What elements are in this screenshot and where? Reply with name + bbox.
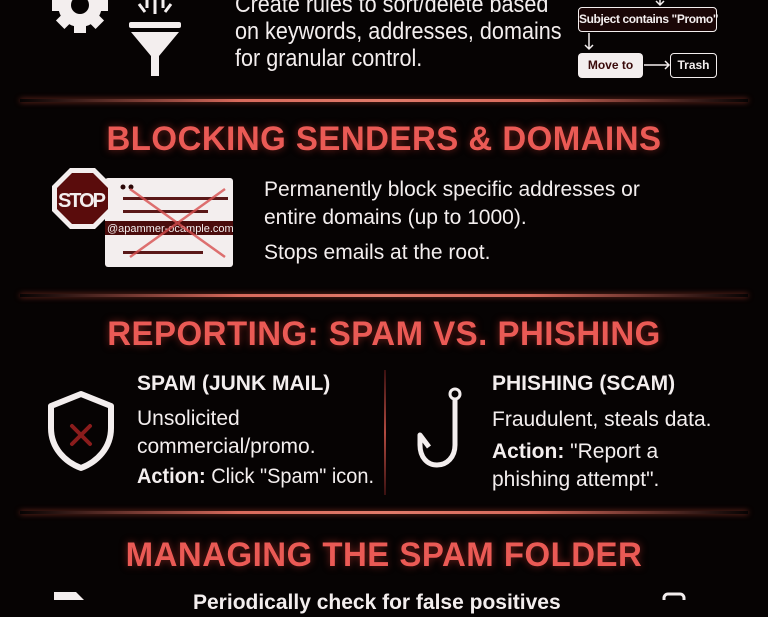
text: blocking description: Permanently block specific addresses or	[264, 178, 640, 201]
flow diagram: Subject contains "Promo"	[579, 12, 718, 26]
icon: stop sign with email card: @apammer-ocample.com	[107, 223, 234, 235]
text: blocking description	[264, 178, 640, 229]
flow diagram: Trash	[677, 58, 710, 72]
flow diagram: Move to	[588, 58, 633, 72]
icon: stop sign with email card: STOP	[58, 190, 106, 212]
icon: gear	[52, 0, 108, 33]
icon: shield	[48, 391, 114, 471]
panel: phishing: phishing attempt".	[492, 468, 659, 491]
flow diagram	[578, 0, 718, 78]
text: filters description	[235, 0, 562, 72]
heading: managing spam folder: MANAGING THE SPAM FOLDER	[126, 536, 642, 574]
panel: spam: Action: Click "Spam" icon.	[137, 465, 374, 488]
icon: funnel	[129, 0, 181, 76]
heading: reporting: REPORTING: SPAM VS. PHISHING	[107, 315, 661, 353]
text: filters description: on keywords, addresses, domains	[235, 18, 562, 45]
panel: spam	[137, 372, 374, 488]
icon: hook	[418, 388, 462, 468]
text: blocking description: entire domains (up to 1000).	[264, 206, 527, 229]
panel: phishing: Action: "Report a	[492, 440, 658, 463]
panel: phishing: PHISHING (SCAM)	[492, 372, 675, 395]
panel: phishing: Fraudulent, steals data.	[492, 408, 711, 431]
icons: bottom partial	[54, 592, 84, 600]
panel: spam: SPAM (JUNK MAIL)	[137, 372, 330, 395]
panel: phishing	[492, 372, 711, 491]
panel: spam: Unsolicited	[137, 407, 240, 430]
panel: spam: commercial/promo.	[137, 435, 316, 458]
text: filters description: for granular control.	[235, 45, 422, 72]
heading: blocking: BLOCKING SENDERS & DOMAINS	[107, 120, 661, 158]
text: Stops emails at the root.	[264, 241, 490, 264]
icon: stop sign with email card	[52, 168, 234, 267]
bottom partial text: Periodically check for false positives	[193, 591, 561, 614]
